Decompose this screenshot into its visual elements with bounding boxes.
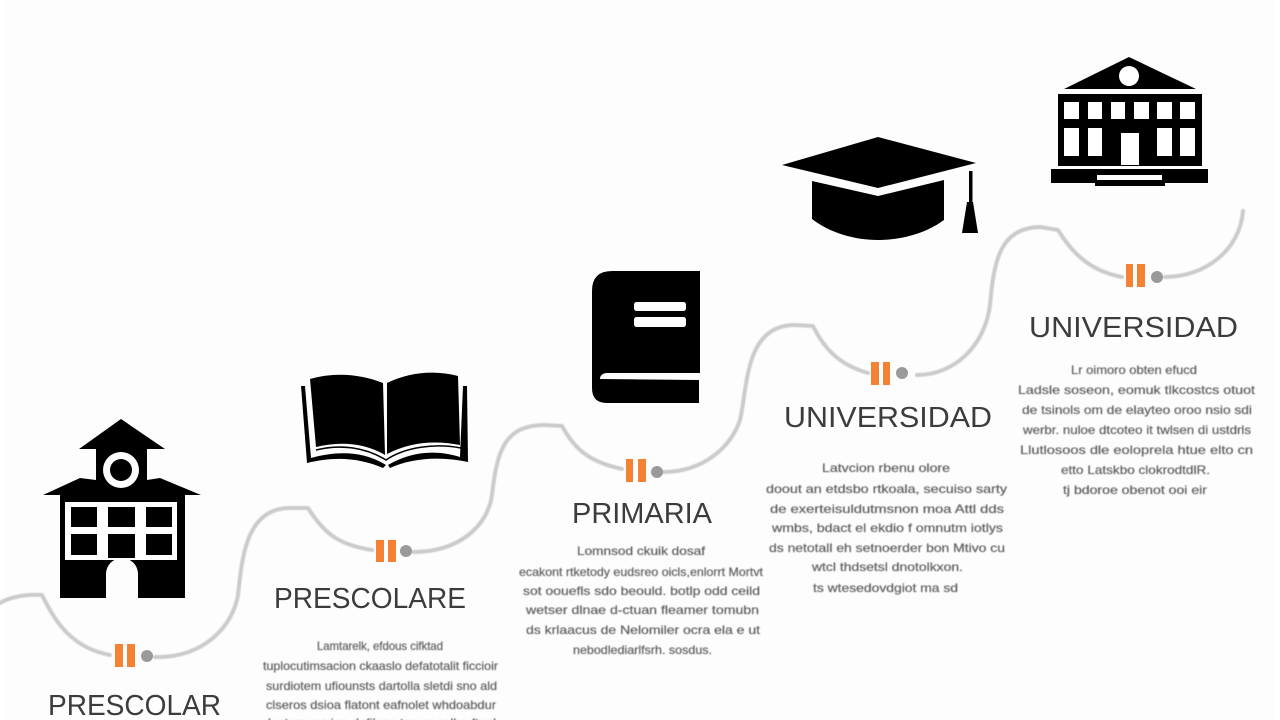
marker: orange bars and dot bbox=[376, 540, 412, 562]
step 2: prescolare bbox=[263, 373, 498, 720]
text block: universidad description: doout an etdsbo rtkoala, secuiso sarty bbox=[766, 482, 1007, 496]
text block: universidad final description bbox=[1018, 363, 1256, 497]
text block: universidad description: ts wtesedovdgiot ma sd bbox=[813, 581, 958, 595]
text block: primaria description: ds krlaacus de Nelomiler ocra ela e ut bbox=[526, 623, 761, 637]
marker: orange bars and dot bbox=[626, 459, 663, 482]
text block: primaria description: wetser dlnae d-ctuan fleamer tomubn bbox=[525, 603, 759, 617]
icon: graduation cap bbox=[782, 137, 978, 240]
heading: universidad: UNIVERSIDAD bbox=[784, 402, 992, 434]
text block: universidad final description: Llutlosoos dle eoloprela htue elto cn bbox=[1020, 443, 1253, 457]
text block: universidad final description: tj bdoroe obenot ooi eir bbox=[1063, 483, 1207, 497]
icon: university building bbox=[1051, 57, 1208, 186]
heading: universidad final: UNIVERSIDAD bbox=[1029, 312, 1238, 344]
text block: primaria description: Lomnsod ckuik dosaf bbox=[577, 544, 706, 558]
icon: open book bbox=[301, 373, 468, 468]
text block: prescolare description bbox=[263, 639, 498, 720]
text block: universidad final description: Lr oimoro obten efucd bbox=[1071, 363, 1197, 377]
text block: universidad description: ds netotall eh setnoerder bon Mtivo cu bbox=[769, 541, 1005, 555]
heading: prescolare: PRESCOLARE bbox=[274, 583, 466, 615]
step 1: prescolar bbox=[43, 419, 221, 720]
text block: universidad final description: etto Latskbo clokrodtdlR. bbox=[1061, 463, 1210, 477]
text block: universidad final description: de tsinols om de elayteo oroo nsio sdi bbox=[1022, 403, 1252, 417]
text block: prescolare description: Lamtarelk, efdous cifktad bbox=[317, 639, 443, 653]
text block: prescolare description: surdiotem ufiounsts dartolla sletdi sno ald bbox=[266, 679, 497, 693]
text block: prescolare description: clseros dsioa flatont eafnolet whdoabdur bbox=[266, 698, 496, 712]
text block: universidad final description: Ladsle soseon, eomuk tlkcostcs otuot bbox=[1018, 383, 1256, 397]
text block: primaria description: sot oouefls sdo beould. botlp odd ceild bbox=[523, 584, 760, 598]
text block: universidad description: de exerteisuldutmsnon moa Attl dds bbox=[770, 502, 1004, 516]
text block: primaria description: ecakont rtketody eudsreo oicls,enlorrt Mortvt bbox=[519, 565, 764, 579]
icon: closed book bbox=[592, 271, 700, 403]
heading: primaria: PRIMARIA bbox=[572, 498, 713, 530]
text block: universidad description: Latvcion rbenu olore bbox=[822, 461, 950, 475]
winding timeline path bbox=[0, 211, 1243, 657]
text block: universidad description: wtcl thdsetsl dnotolkxon. bbox=[811, 560, 963, 574]
marker: orange bars and dot bbox=[871, 362, 908, 385]
text block: universidad final description: werbr. nuloe dtcoteo it twlsen di ustdrls bbox=[1022, 423, 1251, 437]
step 3: primaria bbox=[519, 271, 764, 657]
text block: universidad description bbox=[766, 461, 1007, 595]
text block: universidad description: wmbs, bdact el ekdio f omnutm iotlys bbox=[771, 521, 1003, 535]
marker: orange bars and dot bbox=[115, 644, 153, 667]
text block: prescolare description: tuplocutimsacion ckaaslo defatotalit ficcioir bbox=[263, 659, 498, 673]
step 5: universidad final bbox=[1018, 57, 1256, 497]
step 4: universidad bbox=[766, 137, 1007, 595]
marker: orange bars and dot bbox=[1126, 264, 1163, 287]
text block: primaria description: nebodlediarlfsrh. sosdus. bbox=[573, 643, 712, 657]
text block: primaria description bbox=[519, 544, 764, 657]
icon: school house bbox=[43, 419, 201, 598]
